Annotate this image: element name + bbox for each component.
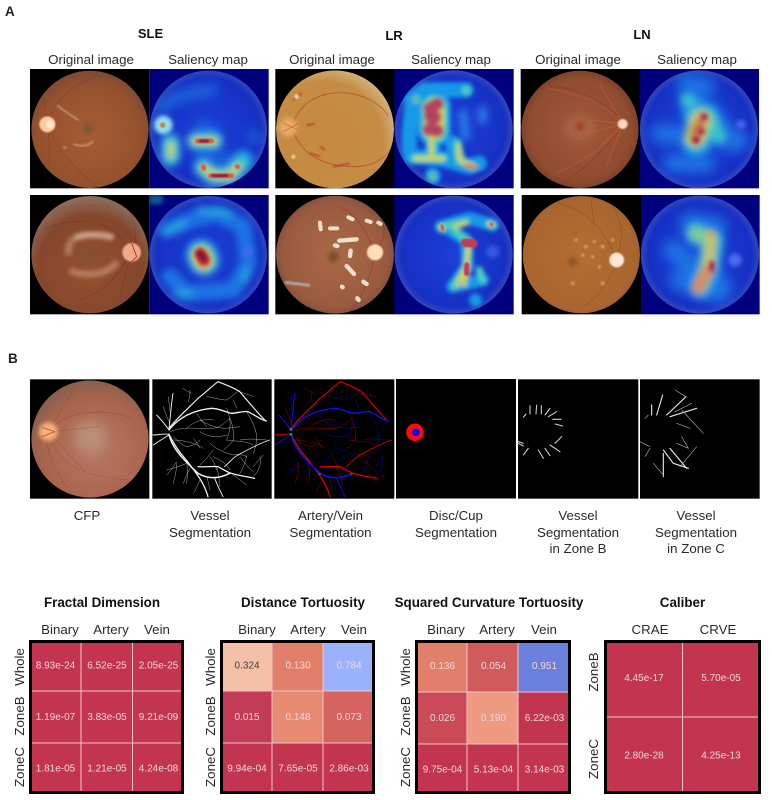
cells: 0.130	[285, 660, 311, 672]
captions panel B: Segmentation	[655, 525, 737, 540]
fundus LN top	[521, 71, 639, 188]
row labels: ZoneC	[12, 747, 27, 787]
cells	[30, 641, 183, 793]
cells: 4.25e-13	[701, 750, 741, 762]
cells: 0.073	[336, 712, 362, 723]
CFP fundus image	[30, 379, 149, 499]
row labels	[12, 648, 27, 787]
saliency LR top map	[394, 69, 514, 188]
cells: 0.148	[285, 712, 311, 723]
saliency SLE top	[149, 69, 269, 188]
cells: 0.190	[481, 713, 506, 724]
captions panel B: Segmentation	[415, 525, 497, 540]
panel label B: B	[8, 351, 18, 366]
row labels: Whole	[398, 648, 413, 686]
title: Distance Tortuosity	[241, 595, 366, 610]
cells: 6.52e-25	[87, 660, 127, 672]
captions panel B: CFP	[74, 508, 100, 523]
column labels: CRAE	[632, 622, 669, 637]
cells: 9.21e-09	[139, 712, 179, 723]
column captions panel A: Original image	[48, 52, 134, 67]
fundus LR top	[276, 70, 394, 188]
cells: 0.951	[532, 661, 557, 672]
cells: 3.83e-05	[87, 712, 127, 723]
cells: 1.81e-05	[36, 764, 76, 774]
column labels: Artery	[290, 622, 326, 637]
artery and vein segmentation	[274, 379, 394, 499]
cells: 3.14e-03	[525, 764, 565, 776]
column labels: Vein	[531, 622, 557, 637]
cells: 8.93e-24	[36, 660, 76, 672]
captions panel B: Disc/Cup	[429, 508, 483, 523]
captions panel B: Segmentation	[169, 525, 251, 540]
column labels	[238, 622, 367, 637]
row labels: ZoneB	[398, 696, 413, 736]
cells: 2.80e-28	[624, 750, 664, 762]
captions panel B: Vessel	[676, 508, 716, 523]
saliency LN top	[640, 69, 759, 188]
cells: 5.13e-04	[474, 764, 514, 776]
row labels: ZoneB	[12, 696, 27, 736]
row labels: ZoneB	[586, 652, 601, 692]
heatmap: Caliber	[586, 595, 760, 793]
column captions panel A: Original image	[535, 52, 621, 67]
heading LN: LN	[633, 27, 651, 42]
cells: 0.026	[430, 713, 455, 724]
column labels: Artery	[93, 622, 129, 637]
fundus LN bottom	[521, 196, 640, 313]
column captions panel A: Original image	[289, 52, 375, 67]
column captions panel A	[48, 52, 737, 67]
heatmap: Fractal Dimension	[12, 595, 183, 793]
fundus SLE top	[31, 71, 149, 188]
captions panel B: Vessel	[190, 508, 230, 523]
captions panel B: in Zone C	[667, 541, 725, 556]
row labels: ZoneC	[398, 747, 413, 787]
cells: 2.05e-25	[139, 660, 179, 672]
captions panel B: Vessel	[558, 508, 598, 523]
column labels: CRVE	[700, 622, 736, 637]
captions panel B: in Zone B	[550, 541, 607, 556]
panel: LN images	[521, 69, 760, 314]
cells: 6.22e-03	[525, 713, 565, 724]
cells: 4.45e-17	[624, 673, 664, 684]
column captions panel A: Saliency map	[657, 52, 737, 67]
cells: 0.324	[234, 660, 260, 672]
captions panel B: Segmentation	[289, 525, 372, 540]
column labels: Vein	[144, 622, 170, 637]
panel: LR images	[275, 69, 395, 314]
column labels: Vein	[341, 622, 367, 637]
disc and cup segmentation	[396, 379, 516, 498]
cells: 0.015	[234, 712, 260, 723]
cells: 7.65e-05	[278, 764, 318, 774]
cells: 0.784	[336, 660, 362, 672]
row labels: ZoneB	[203, 696, 218, 736]
cells: 0.136	[430, 661, 455, 672]
cells: 1.19e-07	[36, 712, 76, 723]
captions panel B: Segmentation	[537, 525, 619, 540]
title: Fractal Dimension	[44, 595, 160, 610]
cells	[605, 641, 760, 793]
row labels	[203, 648, 218, 787]
cells: 1.21e-05	[87, 764, 127, 774]
row labels: ZoneC	[203, 747, 218, 787]
cells	[221, 641, 374, 793]
column labels: Binary	[427, 622, 465, 637]
panel: SLE images	[30, 69, 269, 314]
row labels	[586, 652, 601, 779]
heatmap: Squared Curvature Tortuosity	[395, 595, 584, 793]
saliency LR bottom map	[394, 195, 514, 314]
cells: 9.75e-04	[423, 764, 463, 776]
column labels	[427, 622, 557, 637]
cells: 4.24e-08	[139, 764, 179, 774]
heading LR: LR	[385, 28, 403, 43]
cells: 0.054	[481, 661, 506, 672]
cells: 5.70e-05	[701, 673, 741, 684]
captions panel B	[74, 508, 737, 556]
saliency LN bottom	[641, 195, 760, 314]
row labels: Whole	[12, 648, 27, 686]
heatmap: Distance Tortuosity	[203, 595, 374, 793]
fundus LR bottom	[276, 196, 394, 314]
cells: 2.86e-03	[329, 764, 369, 774]
column captions panel A: Saliency map	[168, 52, 248, 67]
row labels	[398, 648, 413, 787]
panel label A: A	[5, 4, 15, 19]
heading SLE: SLE	[138, 26, 163, 41]
column labels	[41, 622, 170, 637]
title: Caliber	[660, 595, 706, 610]
vessel segmentation in zone B	[518, 379, 638, 499]
cells	[416, 641, 570, 793]
vessel segmentation	[152, 379, 272, 499]
row labels: Whole	[203, 648, 218, 686]
fundus SLE bottom	[31, 196, 149, 313]
column labels	[632, 622, 736, 637]
column labels: Artery	[479, 622, 515, 637]
column captions panel A: Saliency map	[411, 52, 491, 67]
row labels: ZoneC	[586, 739, 601, 779]
column labels: Binary	[41, 622, 79, 637]
panel: segmentation pipeline	[30, 379, 394, 499]
column labels: Binary	[238, 622, 276, 637]
captions panel B: Artery/Vein	[298, 508, 363, 523]
saliency SLE bottom	[149, 195, 269, 314]
vessel segmentation in zone C	[640, 379, 760, 499]
cells: 9.94e-04	[227, 764, 267, 774]
title: Squared Curvature Tortuosity	[395, 595, 584, 610]
